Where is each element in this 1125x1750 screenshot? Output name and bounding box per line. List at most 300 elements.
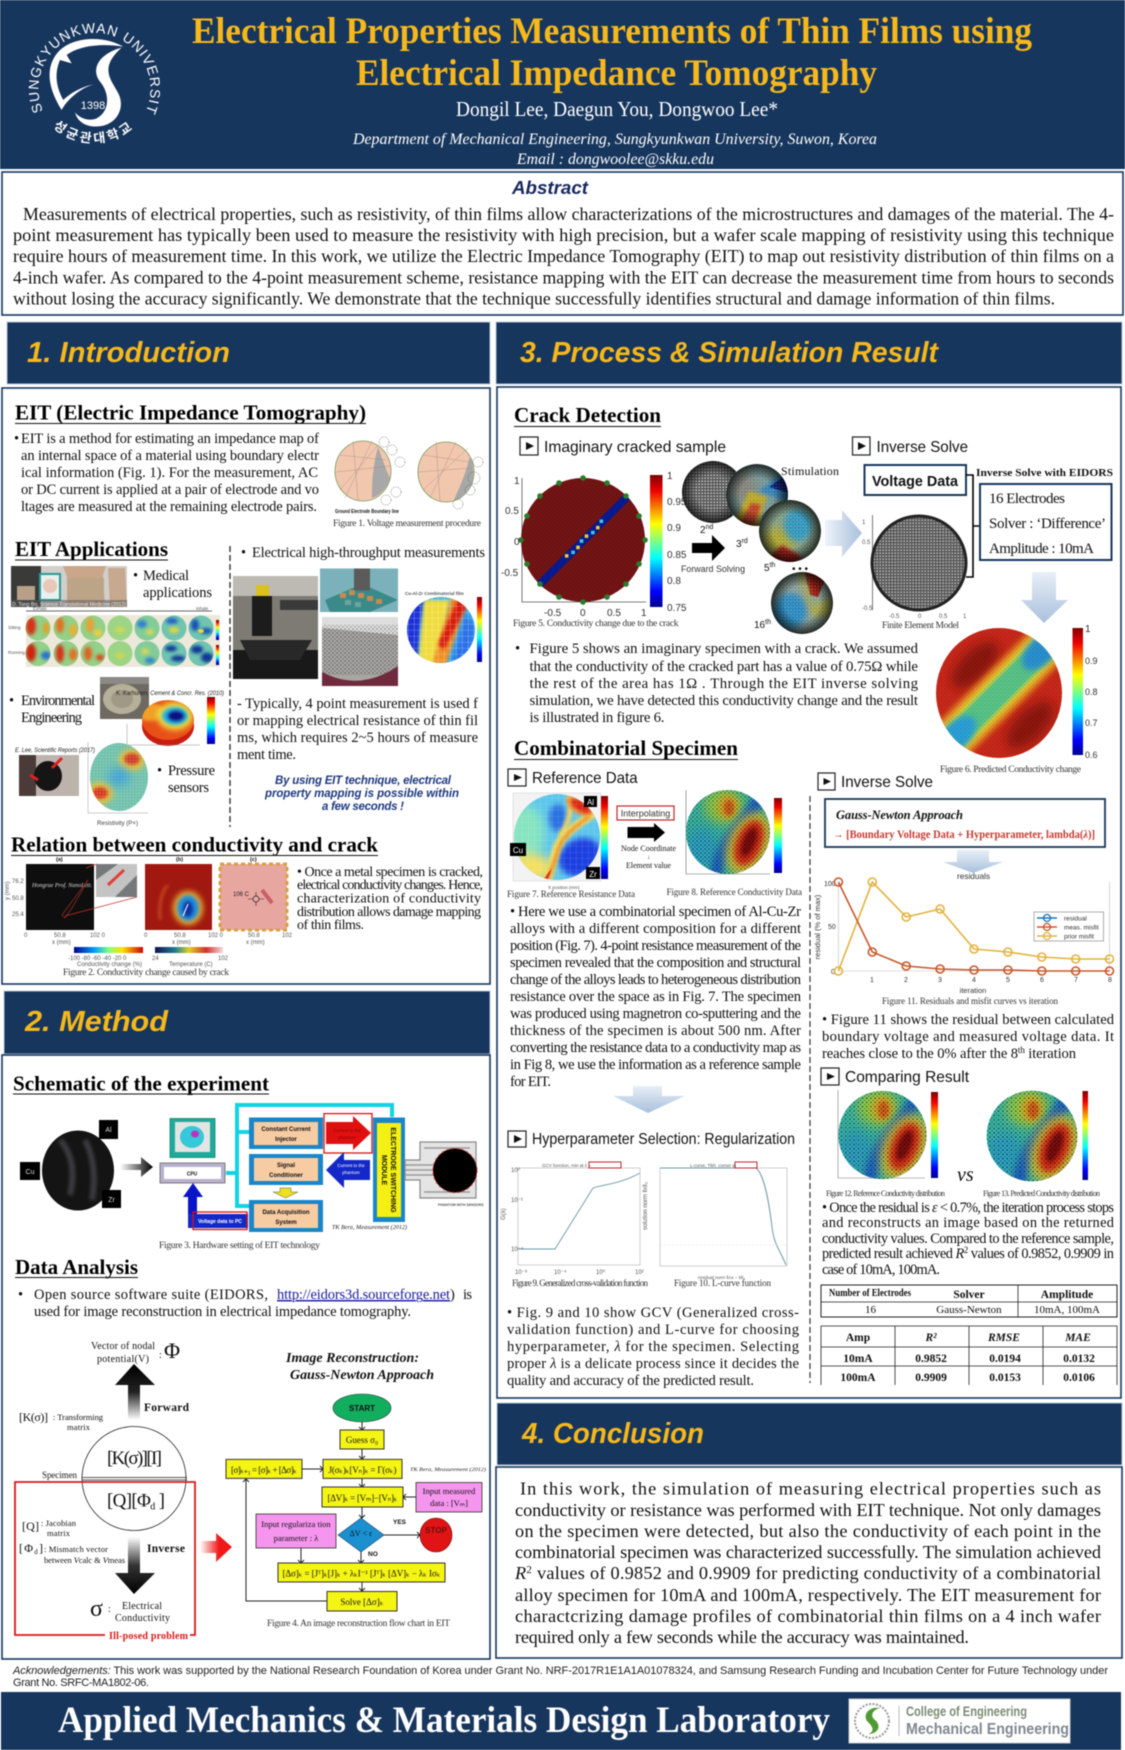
label: yes: YES xyxy=(393,1519,407,1526)
heading: crack detection: Crack Detection xyxy=(514,403,661,427)
node: start xyxy=(333,1394,391,1422)
figure 2: conductivity change caused by crack: 102 xyxy=(282,933,293,939)
figure 2: conductivity change caused by crack: y (mm) xyxy=(5,881,11,900)
box: Gauss-Newton approach xyxy=(825,799,1105,847)
table: results: 10mA xyxy=(843,1353,873,1365)
heatmap: pressure sensor: Resistivity (P×) xyxy=(97,821,138,827)
label: medical applications: • xyxy=(133,568,138,584)
heading: schematic: Schematic of the experiment xyxy=(13,1072,269,1096)
heading: combinatorial specimen: Combinatorial Specimen xyxy=(514,736,738,760)
text: residual result: values of 0.9852, 0.9909 in xyxy=(968,1246,1114,1262)
figure 2: conductivity change caused by crack: Conductivity change (%) xyxy=(77,962,142,968)
subheading: inverse solve: Inverse Solve xyxy=(841,774,933,791)
figure 6: predicted conductivity: Figure 6. Predicted Conductivity change xyxy=(940,765,1081,775)
conclusion text: combinatorial specimen was characterized successfully. The simulation achieved xyxy=(515,1542,1101,1562)
heatmap: environmental disc xyxy=(127,697,215,746)
text: EIDORS software: ) xyxy=(450,1287,455,1303)
block: constant current injector: Injector xyxy=(275,1137,298,1143)
label: ellipsis: • • • xyxy=(792,564,809,575)
block: signal conditioner xyxy=(249,1154,323,1185)
table: experiment settings xyxy=(821,1285,1117,1317)
photo: patterned wafer xyxy=(322,617,398,686)
x axis labels: 4 xyxy=(972,977,976,984)
authors: Dongil Lee, Daegun You, Dongwoo Lee* xyxy=(456,97,778,121)
legend: residual xyxy=(1064,916,1087,922)
arrow: to inverse solve xyxy=(825,510,862,557)
table: results: R² xyxy=(924,1332,937,1344)
figure 6: predicted conductivity: 0.9 xyxy=(1085,656,1098,666)
node: delta sigma: [Δσ]ₖ = [Jᵀ]ₖ[J]ₖ + λₖI⁻¹ [Jᵀ]ₖ [ΔV]ₖ − λₖ Iσₖ xyxy=(282,1568,441,1578)
figure 6: predicted conductivity xyxy=(935,624,1098,775)
section heading: 2. Method: 2. Method xyxy=(24,1006,169,1038)
figure 10: L-curve function: solution norm ‖x‖₂ xyxy=(643,1181,649,1230)
finite element model: -0.5 xyxy=(889,614,900,620)
figure 9: GCV function: 10² xyxy=(635,1270,644,1276)
text: figure 5 description xyxy=(515,641,919,726)
specimen wafer: Cu xyxy=(26,1169,35,1176)
photo: medical EIT belt xyxy=(11,566,127,608)
figure 2: conductivity change caused by crack: 50.8 xyxy=(54,933,66,939)
label: mismatch vector: : Mismatch vector xyxy=(44,1544,108,1554)
text: EIT description: or DC current is applied at a pair of electrode and vo xyxy=(21,482,319,498)
figure 2: conductivity change caused by crack: 106 C xyxy=(233,892,250,898)
figure 2: conductivity change caused by crack: 50.8 xyxy=(174,933,186,939)
footer banner xyxy=(1,1692,1121,1750)
arrow: specimen to system xyxy=(120,1157,153,1177)
table: results: Amp xyxy=(846,1332,870,1344)
figure 9: GCV function: 10⁰ xyxy=(511,1167,521,1174)
figure 7: reference resistance data: Figure 7. Reference Resistance Data xyxy=(507,889,635,899)
figure 10: L-curve function: residual norm ‖Ax − b‖₂ xyxy=(698,1275,745,1280)
label: specimen: Specimen xyxy=(42,1470,78,1480)
flow chart title: Image Reconstruction: xyxy=(285,1351,419,1366)
panel: abstract xyxy=(2,172,1123,315)
figure 10: L-curve function xyxy=(643,1162,787,1288)
label: node to element xyxy=(621,844,676,870)
text: GCV and L-curve: validation function) and L-curve for choosing xyxy=(507,1322,800,1338)
text: combinatorial specimen: for EIT. xyxy=(510,1074,551,1090)
block: constant current injector xyxy=(249,1118,323,1149)
specimen wafer xyxy=(20,1120,121,1210)
node: guess xyxy=(340,1430,384,1449)
figure 2: conductivity change caused by crack: 0 xyxy=(24,933,28,939)
box: Gauss-Newton approach: Gauss-Newton Approach xyxy=(836,808,963,822)
subheading: reference data: Reference Data xyxy=(532,770,638,787)
subheading: inverse solve xyxy=(852,437,968,456)
arrow: current to the phantom (red): phantom xyxy=(338,1135,356,1140)
finite element model: -0.5 xyxy=(862,606,873,612)
x axis labels: 3 xyxy=(938,977,942,984)
x axis labels: 2 xyxy=(904,977,908,984)
node: decision: ΔV < ε xyxy=(350,1529,373,1538)
citation: pressure sensors: E. Lee, Scientific Reports (2017) xyxy=(15,748,95,754)
text: combinatorial specimen: position (Fig. 7). 4-point resistance measurement of the xyxy=(510,938,801,954)
arrow: interpolation xyxy=(628,823,665,842)
figure 2: conductivity change caused by crack: 0 xyxy=(144,933,148,939)
label: K matrix: matrix xyxy=(67,1422,91,1432)
table: results xyxy=(821,1326,1117,1385)
label: node to element: Element value xyxy=(626,861,671,870)
label: vector of nodal potential: : xyxy=(159,1350,162,1361)
box: voltage data: Voltage Data xyxy=(872,473,959,490)
node: input measured data xyxy=(416,1482,482,1512)
text: combinatorial specimen: specimen revealed that the composition and structural xyxy=(510,955,801,971)
arrow: down to predicted xyxy=(1021,572,1068,623)
label: environmental engineering: • xyxy=(9,693,14,709)
text: residual result: and reconstructs an image based on the returned xyxy=(822,1215,1115,1231)
text: figure 5 description: that the conductivity of the cracked part has a value of 0.75Ω while xyxy=(530,659,918,675)
figure 5: conductivity change: 0.5 xyxy=(607,608,621,619)
figure 3: hardware setting xyxy=(159,1105,484,1251)
text: EIDORS software: Open source software suite (EIDORS, xyxy=(34,1287,268,1303)
text: residual result: conductivity values. Compared to the reference sample, xyxy=(822,1231,1114,1247)
figure 2: conductivity change caused by crack: 24 xyxy=(152,956,159,962)
table: results: 0.0153 xyxy=(989,1372,1021,1384)
figure 12: reference conductivity xyxy=(826,1089,945,1198)
acknowledgements: Acknowledgements: This work was supported by the National Research Foundation of Korea under Grant No. NRF-2017R1E1A1A01078324, and Samsung Research Funding and Incubation Center for Future Technology under xyxy=(12,1665,1108,1677)
node: stop: STOP xyxy=(425,1526,447,1535)
label: vector of nodal potential: Φ xyxy=(164,1338,180,1363)
phantom tank: PHANTOM WITH SENSORS xyxy=(438,1203,484,1207)
label: K matrix: [K(σ)] xyxy=(19,1410,48,1424)
text: typical 4-point limitation: - Typically, 4 point measurement is used f xyxy=(237,696,478,712)
arrow: voltage data to PC: Voltage data to PC xyxy=(198,1219,242,1225)
figure 1: voltage measurement procedure: Figure 1. Voltage measurement procedure xyxy=(333,519,481,529)
section heading: 4. Conclusion xyxy=(497,1403,1122,1465)
x axis labels: iteration xyxy=(960,986,986,995)
finite element model: 1 xyxy=(963,614,967,620)
divider: column dashed xyxy=(809,796,811,1383)
figure 5: conductivity change: 0.8 xyxy=(667,576,681,587)
divider: dashed xyxy=(229,546,231,827)
figure 5: conductivity change: 1 xyxy=(641,608,647,619)
node: forward solve xyxy=(323,1459,402,1478)
logo: Sungkyunkwan University seal: 성균관대학교 xyxy=(54,120,133,144)
figure 13: predicted conductivity xyxy=(983,1088,1100,1198)
specimen circle: ] xyxy=(155,1490,165,1512)
heatmap strip: medical: Running xyxy=(8,650,25,655)
text: GCV and L-curve: proper λ is a delicate process since it decides the xyxy=(507,1356,799,1372)
finite element model xyxy=(862,515,967,631)
node: update sigma xyxy=(226,1459,302,1478)
figure 2: conductivity change caused by crack: (a) xyxy=(56,857,63,863)
table: results: 100mA xyxy=(840,1372,876,1384)
figure 13: predicted conductivity: Figure 13. Predicted Conductivity distribution xyxy=(983,1189,1100,1198)
table: results: 0.0106 xyxy=(1063,1372,1095,1384)
figure 2: conductivity change caused by crack: (c) xyxy=(250,857,257,863)
table: results: 0.0194 xyxy=(989,1353,1021,1365)
text: GCV and L-curve xyxy=(507,1305,800,1389)
node: input regularization: Input regulariza tion xyxy=(261,1519,331,1529)
text: EIT description xyxy=(14,431,319,515)
header banner xyxy=(0,0,1125,170)
figure 2: conductivity change caused by crack xyxy=(5,857,293,978)
callout: EIT advantage: By using EIT technique, electrical xyxy=(275,775,452,787)
label: no: NO xyxy=(368,1551,378,1558)
figure 9: GCV function: GCV function, min at λ = xyxy=(542,1163,591,1168)
text: typical 4-point limitation: ms, which requires 2~5 hours of measure xyxy=(237,730,478,746)
figure 2: conductivity change caused by crack: 50.8 xyxy=(12,896,24,902)
section heading: 1. Introduction: 1. Introduction xyxy=(27,337,230,369)
simulation spheres xyxy=(681,461,839,634)
heading: data analysis: Data Analysis xyxy=(15,1255,138,1279)
sphere: 3rd stimulation xyxy=(759,500,821,567)
label: K matrix xyxy=(19,1410,104,1432)
text: residual result: case of 10mA, 100mA. xyxy=(822,1262,940,1278)
figure 11: residuals chart xyxy=(813,871,1114,1006)
text: crack and conductivity: characterization of conductivity xyxy=(297,892,481,906)
section heading: 3. Process & Simulation Result: 3. Process & Simulation Result xyxy=(520,337,939,369)
finite element model: 0.5 xyxy=(862,540,871,546)
specimen wafer: Al xyxy=(105,1127,112,1134)
figure 11: residuals chart: residual (% of max) xyxy=(813,894,822,959)
node: input regularization xyxy=(256,1514,336,1548)
subheading: inverse solve: Inverse Solve xyxy=(876,439,968,456)
node: update sigma: [σ]ₖ₊₁ = [σ]ₖ + [Δσ]ₖ xyxy=(231,1465,297,1475)
cyan signal bus xyxy=(226,1105,392,1206)
text: figure 11 description: th xyxy=(1018,1045,1025,1055)
title xyxy=(192,11,1032,94)
figure 8: reference conductivity data xyxy=(666,788,802,897)
arrow: current to the phantom (red): Current to the xyxy=(333,1128,361,1133)
label: Jacobian xyxy=(22,1518,77,1538)
arrow: current to the phantom (red) xyxy=(324,1114,372,1153)
figure 5: conductivity change: 0.5 xyxy=(505,506,519,517)
caption: figure 4: Figure 4. An image reconstruction flow chart in EIT xyxy=(267,1618,450,1629)
figure 6: predicted conductivity: 1 xyxy=(1085,624,1091,635)
specimen circle xyxy=(82,1426,187,1530)
figure 10: L-curve function: L-curve, Tikh. corner at xyxy=(690,1163,737,1168)
acknowledgements xyxy=(12,1665,1108,1689)
label: 2nd: nd xyxy=(706,524,713,531)
subheading: comparing result: Comparing Result xyxy=(845,1069,970,1086)
ill-posed problem box: Ill-posed problem xyxy=(109,1631,189,1642)
text: crack and conductivity: distribution allows damage mapping xyxy=(297,905,481,920)
label: electrical conductivity: Electrical xyxy=(122,1601,162,1612)
affiliation: Department of Mechanical Engineering, Sungkyunkwan University, Suwon, Korea xyxy=(352,131,877,148)
flow chart: Gauss-Newton xyxy=(226,1351,486,1629)
logo: Sungkyunkwan University seal xyxy=(28,22,161,144)
x axis labels: 5 xyxy=(1006,977,1010,984)
title: Electrical Impedance Tomography xyxy=(356,53,877,94)
conclusion text: In this work, the simulation of measuring electrical properties such as xyxy=(520,1478,1101,1498)
block: data acquisition xyxy=(249,1200,323,1232)
finite element model: Finite Element Model xyxy=(882,621,959,631)
arrow: yellow down xyxy=(273,1188,298,1198)
specimen circle: [K(σ)][I] xyxy=(107,1448,162,1469)
label: 5th: 5 xyxy=(764,563,770,574)
figure 2: conductivity change caused by crack: x (mm) xyxy=(172,940,191,946)
label: mismatch vector xyxy=(19,1541,125,1565)
heading: EIT applications: EIT Applications xyxy=(15,537,168,561)
logo: Sungkyunkwan University seal: 1398 xyxy=(81,100,105,112)
text: combinatorial specimen: in Fig 8, we use the information as a reference sample xyxy=(510,1057,801,1073)
photo: medical EIT belt: D. Tong Bo, Science Translational Medicine (2012) xyxy=(12,602,126,608)
conclusion text: conductivity or resistance was performed with EIT technique. Not only damages xyxy=(515,1500,1101,1520)
email: Email : dongwoolee@skku.edu xyxy=(516,151,714,168)
label: 5th: th xyxy=(770,562,776,569)
table: experiment settings: Number of Electrodes xyxy=(829,1288,911,1299)
figure 5: conductivity change: 0.85 xyxy=(667,550,687,561)
node: input measured data: data : [Vₘ] xyxy=(430,1498,468,1508)
text: figure 5 description: Figure 5 shows an imaginary specimen with a crack. We assumed xyxy=(530,641,919,657)
sphere: 16th stimulation xyxy=(771,571,834,634)
figure 7: reference resistance data: Cu xyxy=(513,846,523,855)
arrow: current to the phantom (blue): phantom xyxy=(342,1170,360,1175)
section heading: 1. Introduction xyxy=(7,322,490,384)
panel: conclusion xyxy=(496,1467,1122,1658)
table: experiment settings: Solver xyxy=(953,1289,985,1301)
phantom tank xyxy=(405,1142,484,1207)
figure 9: GCV function: 10⁰ xyxy=(596,1269,606,1276)
figure 9: GCV function xyxy=(501,1162,648,1288)
section heading: 2. Method xyxy=(4,991,490,1054)
laboratory name: Applied Mechanics & Materials Design Laboratory xyxy=(58,1700,830,1741)
computer xyxy=(160,1118,225,1183)
node: forward solve: J(σₖ)ₖ[Vₙ]ₖ = Γ(σₖ) xyxy=(328,1465,396,1475)
block: data acquisition: System xyxy=(275,1220,297,1226)
figure 2: conductivity change caused by crack: 25.4 xyxy=(12,912,24,918)
figure 2: conductivity change caused by crack: (b) xyxy=(176,857,183,863)
label: medical applications xyxy=(133,568,212,601)
node: delta V: [ΔV]ₖ = [Vₘ]−[Vₙ]ₖ xyxy=(328,1493,398,1503)
abstract text: Measurements of electrical properties, such as resistivity, of thin films allow characterizations of the microstructures and damages of the material. The 4- xyxy=(23,204,1114,224)
heatmap: pressure sensor xyxy=(87,742,150,827)
heatmap: wafer resistance: Cu-Al-Zr Combinatorial film xyxy=(405,591,464,596)
label: forward solving: Forward Solving xyxy=(681,564,745,574)
block: signal conditioner: Signal xyxy=(277,1163,295,1169)
abstract heading: Abstract xyxy=(511,178,589,198)
node: start: START xyxy=(349,1404,375,1413)
figure 5: conductivity change: Figure 5. Conductivity change due to the crack xyxy=(513,619,679,629)
label: environmental engineering xyxy=(9,693,95,726)
abstract text xyxy=(13,204,1114,308)
figure 5: conductivity change: 0 xyxy=(514,537,520,548)
render: probe on sample tiles xyxy=(320,568,398,612)
computer: CPU xyxy=(187,1172,198,1178)
text: combinatorial specimen: thickness of the specimen is about 500 nm. After xyxy=(510,1023,801,1039)
label: K matrix: : Transforming xyxy=(53,1412,104,1422)
text: EIDORS software xyxy=(18,1287,472,1320)
label: pressure sensors: Pressure xyxy=(168,763,215,779)
flow chart title: Gauss-Newton Approach xyxy=(290,1368,434,1383)
node: input regularization: parameter : λ xyxy=(274,1533,319,1543)
text: figure 5 description: the rest of the area has 1Ω . Through the EIT inverse solving xyxy=(530,676,919,692)
figure 7: reference resistance data: Zr xyxy=(589,870,597,879)
conclusion text: R xyxy=(514,1563,526,1583)
node: decision xyxy=(338,1518,384,1552)
node: solve xyxy=(327,1592,397,1611)
finite element model: 0 xyxy=(918,614,922,620)
text: residual result: • Once the residual is ε < 0.7%, the iteration process stops xyxy=(822,1200,1114,1216)
subheading: hyperparameter selection: Hyperparameter Selection: Regularization xyxy=(532,1131,795,1148)
label: vector of nodal potential xyxy=(91,1338,180,1365)
figure 5: conductivity change: 1 xyxy=(514,476,520,487)
conclusion text: on the specimen were detected, but also the conductivity of each point in the xyxy=(515,1521,1101,1541)
figure 8: reference conductivity data: Figure 8. Reference Conductivity Data xyxy=(666,887,802,897)
figure 2: conductivity change caused by crack: Temperature (C) xyxy=(169,962,213,968)
label: interpolating: Interpolating xyxy=(621,808,670,818)
table: experiment settings: 16 xyxy=(865,1304,876,1316)
ill-posed problem box xyxy=(15,1482,195,1642)
figure 1: voltage measurement procedure xyxy=(333,437,483,529)
figure 9: GCV function: 10⁻² xyxy=(511,1198,523,1204)
block: constant current injector: Constant Current xyxy=(261,1127,311,1133)
text: GCV and L-curve: quality and accuracy of the predicted result. xyxy=(507,1373,754,1389)
text: typical 4-point limitation: or mapping electrical resistance of thin fil xyxy=(237,713,478,729)
text: figure 5 description: simulation, we have detected this conductivity change and the result xyxy=(530,693,919,709)
figure 9: GCV function: Figure 9. Generalized cross-validation function xyxy=(512,1278,648,1288)
table: experiment settings: Amplitude xyxy=(1041,1289,1093,1301)
bracket xyxy=(966,475,979,577)
figure 1: voltage measurement procedure: Ground Electrode Boundary line xyxy=(335,509,399,515)
table: results: 0.9909 xyxy=(915,1372,947,1384)
sphere: 2nd stimulation xyxy=(726,464,789,529)
label: 16th: th xyxy=(765,619,771,626)
text: high-throughput heading: Electrical high-throughput measurements xyxy=(252,545,485,561)
text: EIDORS software: used for image reconstruction in electrical impedance tomography. xyxy=(34,1304,411,1320)
text: EIT description: an internal space of a material using boundary electr xyxy=(21,448,319,464)
box: voltage data xyxy=(864,465,966,495)
x axis labels: 1 xyxy=(870,977,874,984)
text: combinatorial specimen: was produced using magnetron co-sputtering and the xyxy=(510,1006,801,1022)
figure 5: conductivity change: 1 xyxy=(667,471,673,482)
figure 2: conductivity change caused by crack: 76.2 xyxy=(12,879,24,885)
table: results: RMSE xyxy=(987,1332,1020,1344)
text: figure 11 description: reaches close to the 0% after the 8 xyxy=(822,1046,1018,1062)
label: environmental engineering: Environmental xyxy=(21,693,95,709)
x axis labels xyxy=(870,977,1112,995)
block: electrode switching module xyxy=(373,1118,405,1222)
node: guess: Guess σ₀ xyxy=(346,1435,378,1445)
block: signal conditioner: Conditioner xyxy=(269,1173,303,1179)
text: combinatorial specimen: • Here we use a combinatorial specimen of Al-Cu-Zr xyxy=(510,904,801,920)
label: interpolating xyxy=(617,806,674,820)
heatmap strip: medical xyxy=(8,606,220,667)
legend xyxy=(1034,912,1104,941)
heading: relation: Relation between conductivity and crack xyxy=(11,832,378,856)
label: medical applications: Medical xyxy=(143,568,189,584)
photo: measurement machine xyxy=(233,576,318,679)
series: prior misfit xyxy=(834,878,1114,975)
label: stimulation: Stimulation xyxy=(781,464,839,478)
figure 5: conductivity change xyxy=(501,471,687,629)
figure 5: conductivity change: 0.9 xyxy=(667,523,681,534)
label: electrical conductivity: σ xyxy=(90,1596,103,1622)
text: EIDORS software: • xyxy=(18,1287,23,1303)
callout: EIT advantage: property mapping is possible within xyxy=(264,788,459,800)
legend: meas. misfit xyxy=(1064,924,1099,932)
figure 2: conductivity change caused by crack: Figure 2. Conductivity change caused by crack xyxy=(63,968,229,978)
figure 9: GCV function: G(λ) xyxy=(501,1208,507,1220)
label: node to element: ↓ xyxy=(647,855,650,861)
figure 10: L-curve function: Figure 10. L-curve function xyxy=(674,1278,772,1288)
node: delta V xyxy=(322,1487,403,1507)
text: EIDORS software: http://eidors3d.sourceforge.net xyxy=(277,1287,450,1303)
figure 9: GCV function: 10⁻⁴ xyxy=(511,1246,524,1253)
section heading: 4. Conclusion: 4. Conclusion xyxy=(521,1418,704,1450)
finite element model: 0.5 xyxy=(939,614,948,620)
figure 9: GCV function: 10⁻⁴ xyxy=(554,1269,567,1276)
text: GCV and L-curve: • Fig. 9 and 10 show GCV (Generalized cross- xyxy=(507,1305,799,1321)
text: figure 11 description: iteration xyxy=(1025,1046,1077,1062)
table: experiment settings: Gauss-Newton xyxy=(936,1304,1002,1316)
specimen wafer: Zr xyxy=(108,1197,115,1204)
figure 11: residuals chart: residuals xyxy=(957,871,990,881)
figure 2: conductivity change caused by crack: 102 xyxy=(218,956,229,962)
figure 5: conductivity change: 0.95 xyxy=(667,497,687,508)
text: combinatorial specimen: converting the resistance data to a conductivity map as xyxy=(510,1040,801,1056)
